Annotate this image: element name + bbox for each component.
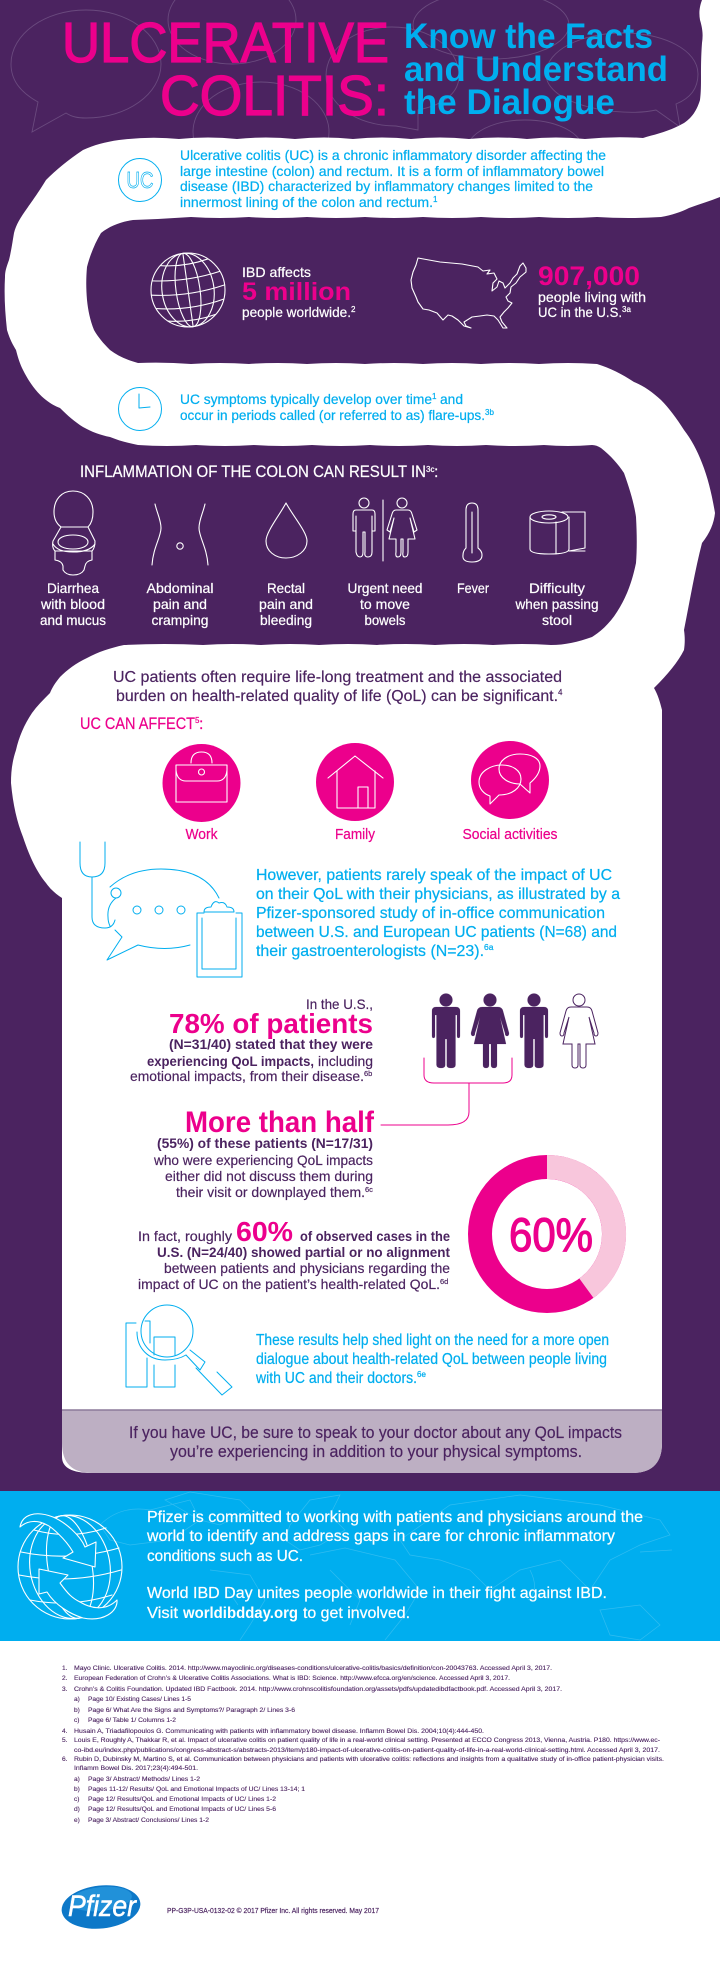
title: Know the Facts <box>404 17 653 56</box>
stat: more than half: their visit or downplayed them. <box>176 1184 365 1200</box>
stat: more than half <box>153 1106 375 1200</box>
references: Page 6/ What Are the Signs and Symptoms?/ Paragraph 2/ Lines 3-6 <box>88 1707 295 1714</box>
symptoms text: and <box>440 391 463 407</box>
bracket connector <box>381 1058 512 1125</box>
donut chart: 60% <box>480 1167 614 1301</box>
references: European Federation of Crohn’s & Ulcerative Colitis Associations. What is IBD: Science. http://www.efcca.org/en/science. Accessed April 3, 2017. <box>74 1675 510 1682</box>
intro text: Ulcerative colitis (UC) is a chronic inflammatory disorder affecting the <box>180 147 606 163</box>
icon: stethoscope, speech bubble and clipboard <box>80 842 242 977</box>
icon: work <box>162 744 240 822</box>
symptom labels: Urgent need <box>348 580 422 596</box>
stat: 907,000 in the U.S.: 3a <box>622 305 631 314</box>
symptom labels: bleeding <box>260 612 312 628</box>
stat: 60% text <box>138 1216 450 1292</box>
panel: call to action <box>62 1410 662 1473</box>
references: c) <box>74 1717 80 1724</box>
QoL burden statement: 4 <box>558 688 563 697</box>
references: Page 12/ Results/QoL and Emotional Impacts of UC/ Lines 5-6 <box>88 1806 276 1813</box>
references: 4. <box>62 1728 68 1735</box>
stat: 907,000 in the U.S.: people living with <box>538 289 646 305</box>
conclusion text <box>255 1332 609 1387</box>
references: a) <box>74 1776 80 1783</box>
panel: call to action: you’re experiencing in addition to your physical symptoms. <box>170 1443 582 1461</box>
references: 6. <box>62 1756 68 1763</box>
affect labels: Social activities <box>462 827 558 843</box>
copyright: PP-G3P-USA-0132-02 © 2017 Pfizer Inc. All rights reserved. May 2017 <box>167 1906 379 1915</box>
heading: UC can affect: 5 <box>195 716 200 725</box>
icon: family <box>316 743 394 821</box>
conclusion text: 6e <box>417 1370 426 1379</box>
symptom labels: Diarrhea <box>47 580 99 596</box>
Pfizer logo <box>59 1881 143 1933</box>
stat: 5 million worldwide: IBD affects <box>242 264 311 280</box>
references: Mayo Clinic. Ulcerative Colitis. 2014. http://www.mayoclinic.org/diseases-conditions/ulcerative-colitis/basics/definition/con-20043763. Accessed April 3, 2017. <box>74 1665 552 1672</box>
stat: 78% of patients: experiencing QoL impacts, <box>147 1053 314 1069</box>
commitment text: to get involved. <box>303 1605 410 1622</box>
icon: drop <box>266 503 307 558</box>
references: b) <box>74 1707 80 1714</box>
stat: 60% text: 60% <box>236 1216 293 1247</box>
icon: US map <box>411 258 526 328</box>
QoL burden statement: UC patients often require life-long treatment and the associated <box>113 669 562 686</box>
icon: abdomen <box>152 504 208 565</box>
symptoms text: UC symptoms typically develop over time <box>180 391 432 407</box>
heading: UC can affect: UC CAN AFFECT <box>80 714 195 733</box>
affect labels: Family <box>335 827 376 843</box>
symptom labels: stool <box>542 612 572 628</box>
commitment text: world to identify and address gaps in care for chronic inflammatory <box>146 1528 615 1545</box>
intro text: 1 <box>433 195 438 204</box>
QoL burden statement <box>113 669 563 705</box>
references: e) <box>74 1817 80 1824</box>
commitment text <box>146 1509 643 1622</box>
references: Page 10/ Existing Cases/ Lines 1-5 <box>88 1696 191 1703</box>
stat: 5 million worldwide: 2 <box>351 305 356 314</box>
stat: 78% of patients: In the U.S., <box>306 996 373 1012</box>
study text: between U.S. and European UC patients (N=68) and <box>256 924 617 941</box>
heading: inflammation: : <box>434 464 438 481</box>
symptom labels: Fever <box>457 580 489 596</box>
references: c) <box>74 1796 80 1803</box>
stat: 78% of patients: 6b <box>364 1069 372 1078</box>
symptom labels: to move <box>360 596 410 612</box>
affect labels: Work <box>186 827 218 843</box>
intro text: disease (IBD) characterized by inflammatory changes limited to the <box>180 178 593 194</box>
stat: 60% text: U.S. (N=24/40) showed partial or no alignment <box>157 1244 450 1260</box>
title: and Understand <box>404 50 668 89</box>
study text: However, patients rarely speak of the impact of UC <box>256 867 612 884</box>
conclusion text: with UC and their doctors. <box>255 1370 417 1387</box>
stat: more than half: either did not discuss them during <box>165 1168 373 1184</box>
symptom labels: cramping <box>152 612 208 628</box>
symptom labels: Difficulty <box>529 580 585 596</box>
symptoms text: 3b <box>485 408 494 417</box>
references: b) <box>74 1786 80 1793</box>
stat: more than half: who were experiencing QoL impacts <box>153 1152 373 1168</box>
purple background <box>0 0 720 1491</box>
stat: 60% text: impact of UC on the patient’s health-related QoL. <box>138 1276 440 1292</box>
references: 2. <box>62 1675 68 1682</box>
title: ULCERATIVE <box>62 11 389 75</box>
stat: 78% of patients: including <box>318 1053 373 1069</box>
icon: globe with arrows <box>18 1509 122 1625</box>
stat: 60% text: 6d <box>440 1277 448 1286</box>
symptoms text <box>180 391 494 423</box>
title <box>62 11 668 128</box>
heading: UC can affect: : <box>199 716 203 733</box>
references: Pages 11-12/ Results/ QoL and Emotional Impacts of UC/ Lines 13-14; 1 <box>88 1786 305 1793</box>
references: co-ibd.eu/index.php/publications/congress-abstract-s/abstracts-2013/item/p180-impact-of-ulcerative-colitis-on-patient-quality-of-life-in-a-real-world-clinical-setting.html. Accessed April 3, 2017. <box>74 1747 660 1754</box>
stat: more than half: 6c <box>365 1185 373 1194</box>
references <box>62 1665 664 1824</box>
references: Page 3/ Abstract/ Conclusions/ Lines 1-2 <box>88 1817 209 1824</box>
stat: 60% text: In fact, roughly <box>138 1228 232 1244</box>
icon: magnifier over bars <box>126 1305 232 1395</box>
references: d) <box>74 1806 80 1813</box>
study text: their gastroenterologists (N=23). <box>256 943 484 960</box>
commitment text: Visit <box>147 1605 179 1622</box>
stat: 60% text: of observed cases in the <box>300 1228 450 1244</box>
intro text: large intestine (colon) and rectum. It is a form of inflammatory bowel <box>180 163 604 179</box>
stat: 5 million worldwide: 5 million <box>242 278 351 306</box>
stat: more than half: More than half <box>185 1106 375 1139</box>
title: COLITIS: <box>160 64 389 128</box>
symptom labels: and mucus <box>40 612 106 628</box>
world map watermark <box>100 1492 672 1640</box>
symptom labels: pain and <box>153 596 207 612</box>
study text: on their QoL with their physicians, as illustrated by a <box>256 886 620 903</box>
white colon shape <box>5 0 720 1473</box>
references: Page 12/ Results/QoL and Emotional Impacts of UC/ Lines 1-2 <box>88 1796 276 1803</box>
stat: 78% of patients: emotional impacts, from their disease. <box>130 1068 364 1084</box>
stat: 907,000 in the U.S. <box>538 261 646 320</box>
stat: 78% of patients: 78% of patients <box>169 1008 373 1039</box>
references: 5. <box>62 1737 68 1744</box>
background speech bubbles <box>11 0 698 182</box>
commitment text: worldibdday.org <box>182 1605 298 1622</box>
icon: UC circle: UC <box>126 167 154 193</box>
commitment text: World IBD Day unites people worldwide in their fight against IBD. <box>147 1585 607 1602</box>
references: Louis E, Roughly A, Thakkar R, et al. Impact of ulcerative colitis on patient quality of life in a real-world clinical setting. Presented at ECCO Congress 2013, Vienna, Austria. P180. https://www.ec- <box>74 1737 660 1744</box>
stat: 907,000 in the U.S.: 907,000 <box>538 261 640 291</box>
intro text: innermost lining of the colon and rectum. <box>180 194 433 210</box>
references: 3. <box>62 1686 68 1693</box>
conclusion text: These results help shed light on the need for a more open <box>256 1332 609 1349</box>
panel: Pfizer commitment <box>0 1491 720 1641</box>
Pfizer logo: Pfizer <box>68 1890 137 1923</box>
icon: globe <box>146 248 230 332</box>
study text: 6a <box>484 942 494 952</box>
icon: toilet paper <box>530 511 585 554</box>
references: Crohn’s & Colitis Foundation. Updated IBD Factbook. 2014. http://www.crohnscolitisfoundation.org/assets/pdfs/updatedibdfactbook.pdf. Accessed April 3, 2017. <box>74 1686 562 1693</box>
heading: inflammation: INFLAMMATION OF THE COLON CAN RESULT IN <box>80 463 426 481</box>
icon: four patient figures <box>432 994 598 1068</box>
stat: 78% of patients <box>130 996 373 1084</box>
icon: thermometer <box>463 503 482 562</box>
symptoms text: occur in periods called (or referred to as) flare-ups. <box>180 407 485 423</box>
references: Page 6/ Table 1/ Columns 1-2 <box>88 1717 176 1724</box>
icon: restroom figures <box>353 498 417 561</box>
icon: social activities <box>471 741 549 819</box>
stat: 907,000 in the U.S.: UC in the U.S. <box>538 304 622 320</box>
commitment text: conditions such as UC. <box>147 1548 303 1565</box>
symptom labels <box>40 580 599 628</box>
references: Rubin D, Dubinsky M, Martino S, et al. Communication between physicians and patients with ulcerative colitis: reflections and insights from a qualitative study of in-office patient-physician visits. <box>74 1756 664 1763</box>
QoL burden statement: burden on health-related quality of life (QoL) can be significant. <box>116 688 558 705</box>
commitment text: Pfizer is committed to working with patients and physicians around the <box>147 1509 643 1526</box>
conclusion text: dialogue about health-related QoL between people living <box>256 1351 607 1368</box>
study text <box>256 867 620 960</box>
study text: Pfizer-sponsored study of in-office communication <box>256 905 605 922</box>
references: Inflamm Bowel Dis. 2017;23(4):494-501. <box>74 1765 198 1772</box>
references: 1. <box>62 1665 68 1672</box>
symptom labels: with blood <box>40 596 105 612</box>
icon: toilet <box>53 491 95 575</box>
symptom labels: when passing <box>515 596 598 612</box>
references: a) <box>74 1696 80 1703</box>
symptoms text: 1 <box>432 392 437 401</box>
icon: clock <box>118 388 162 430</box>
stat: 5 million worldwide: people worldwide. <box>242 304 351 320</box>
donut chart: 60%: 60% <box>509 1208 593 1261</box>
panel: call to action: If you have UC, be sure to speak to your doctor about any QoL impacts <box>129 1424 622 1442</box>
icon: UC circle <box>118 158 162 202</box>
intro text <box>180 147 606 210</box>
stat: 5 million worldwide <box>242 264 356 320</box>
symptom labels: Rectal <box>267 580 305 596</box>
stat: 78% of patients: (N=31/40) stated that they were <box>169 1036 373 1052</box>
references: Page 3/ Abstract/ Methods/ Lines 1-2 <box>88 1776 200 1783</box>
heading: inflammation: 3c <box>426 465 434 474</box>
symptom labels: bowels <box>364 612 406 628</box>
symptom labels: Abdominal <box>146 580 214 596</box>
title: the Dialogue <box>404 83 615 122</box>
references: Husain A, Triadafilopoulos G. Communicating with patients with inflammatory bowel disease. Inflamm Bowel Dis. 2004;10(4):444-450. <box>74 1728 484 1735</box>
stat: 60% text: between patients and physicians regarding the <box>164 1260 450 1276</box>
symptom labels: pain and <box>259 596 313 612</box>
affect labels <box>186 827 558 843</box>
stat: more than half: (55%) of these patients (N=17/31) <box>157 1135 373 1151</box>
